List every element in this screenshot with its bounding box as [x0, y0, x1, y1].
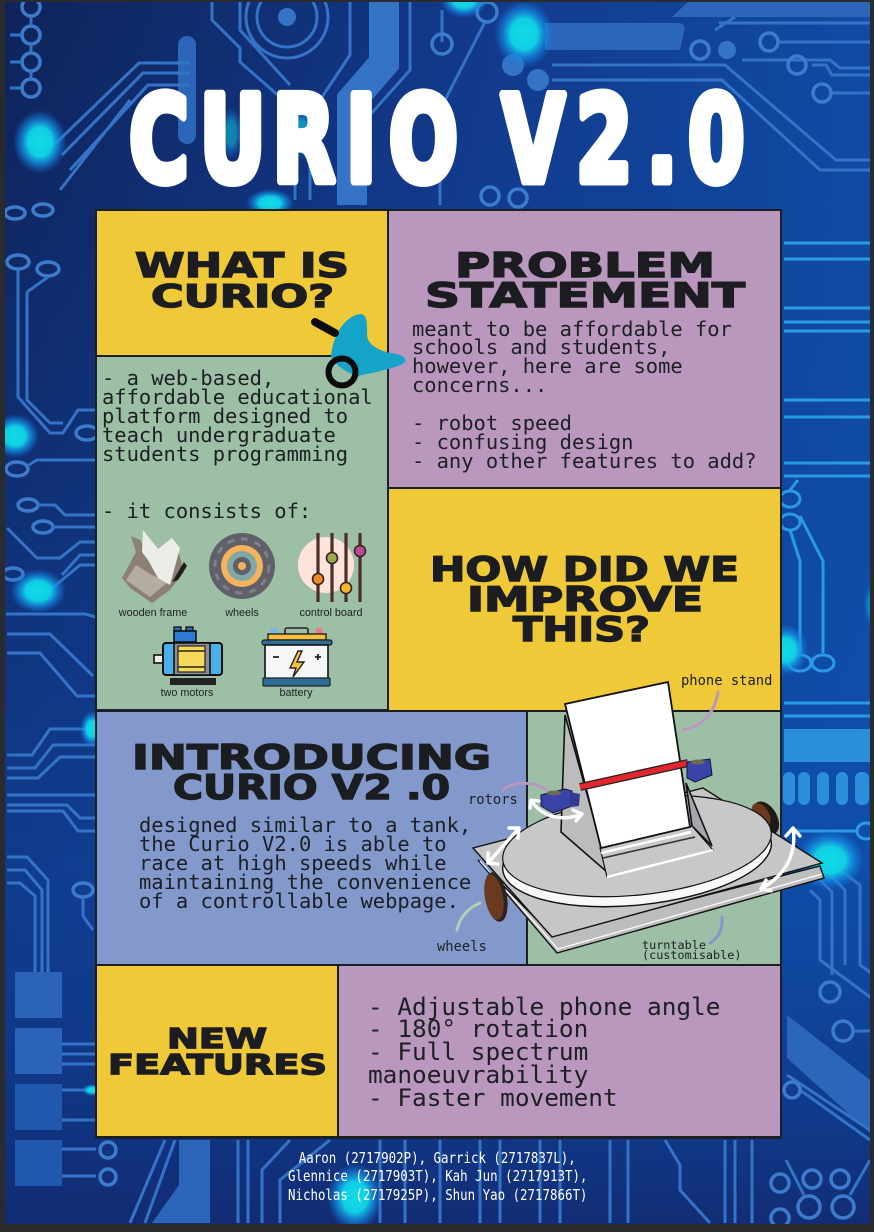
- text: features list: - Adjustable phone angle: [368, 992, 720, 1021]
- heading: problem statement: STATEMENT: [425, 276, 745, 315]
- credits: [288, 1150, 587, 1204]
- label: control board: control board: [299, 607, 363, 619]
- text: features list: manoeuvrability: [368, 1060, 588, 1089]
- heading: how did we improve this: HOW DID WE: [430, 550, 739, 589]
- panel: new features list: [339, 966, 780, 1136]
- icon: two motors: [154, 627, 222, 685]
- label: turntable: turntable: [642, 938, 706, 952]
- text: platform description: [102, 366, 373, 466]
- heading: problem statement: [425, 246, 745, 315]
- panel: new features heading: [97, 966, 337, 1136]
- icon: battery: [262, 628, 332, 686]
- text: problem body: however, here are some: [412, 354, 683, 378]
- icon: curio logo: [315, 314, 405, 386]
- callout curve: turntable: [710, 917, 722, 943]
- red bar: [580, 763, 688, 787]
- text: platform description: affordable educational: [102, 385, 373, 409]
- label: wooden frame: wooden frame: [118, 607, 187, 619]
- turntable: [498, 783, 776, 919]
- callout curve: phone stand: [683, 692, 718, 730]
- icon: control board: [298, 533, 366, 602]
- left side traces: [5, 207, 25, 219]
- robot illustration: [437, 673, 824, 962]
- stand base: [600, 826, 713, 877]
- text: intro body: race at high speeds while: [139, 851, 447, 875]
- text: problem body: [412, 317, 757, 473]
- wheel: right rear: [747, 797, 785, 839]
- text: features list: - Faster movement: [368, 1083, 618, 1112]
- label: battery: battery: [279, 687, 313, 699]
- heading: how did we improve this: [430, 550, 739, 649]
- panel: introducing curio v2.0: [97, 712, 526, 964]
- rotor: left: [541, 789, 580, 813]
- arrows: [488, 800, 800, 891]
- panel: description: [97, 357, 387, 709]
- heading: what is curio: CURIO?: [151, 279, 334, 315]
- label: two motors: two motors: [161, 687, 214, 699]
- heading: how did we improve this: IMPROVE: [467, 580, 703, 619]
- text: problem body: - robot speed: [412, 411, 572, 435]
- heading: what is curio: WHAT IS: [135, 246, 349, 285]
- text: platform description: - a web-based,: [102, 366, 274, 390]
- callout curve: wheels: [457, 903, 480, 930]
- text: features list: - Full spectrum: [368, 1037, 588, 1066]
- title: CURIO V2.0: [129, 71, 744, 209]
- base plate upper: [473, 788, 822, 937]
- label: turntable: (customisable): [642, 948, 741, 962]
- base plate lower: [478, 860, 824, 953]
- heading: problem statement: PROBLEM: [455, 246, 715, 285]
- label: rotors: rotors: [468, 792, 518, 808]
- text: it consists of: - it consists of:: [102, 499, 311, 523]
- text: features list: [368, 992, 720, 1112]
- heading: introducing curio v2.0: INTRODUCING: [132, 738, 491, 777]
- heading: what is curio: [135, 246, 349, 315]
- text: intro body: [139, 813, 471, 913]
- label: wheels: wheels: [437, 939, 487, 955]
- rotor: right: [687, 759, 712, 782]
- panel: robot background: [528, 712, 780, 964]
- callout curve: rotors: [503, 783, 547, 790]
- right side traces: [784, 243, 874, 476]
- panel: how did we improve: [389, 489, 780, 710]
- bottom traces: [100, 1142, 116, 1158]
- icon: wheel: [209, 533, 275, 599]
- heading: new features: [108, 1022, 327, 1081]
- heading: introducing curio v2.0: CURIO V2 .0: [173, 768, 450, 807]
- text: problem body: - confusing design: [412, 430, 633, 454]
- text: intro body: designed similar to a tank,: [139, 813, 471, 837]
- text: intro body: maintaining the convenience: [139, 870, 471, 894]
- label: phone stand: phone stand: [681, 673, 772, 689]
- credits: Glennice (2717903T), Kah Jun (2717913T),: [288, 1168, 587, 1185]
- text: problem body: - any other features to add?: [412, 449, 757, 473]
- text: problem body: meant to be affordable for: [412, 317, 732, 341]
- text: features list: - 180° rotation: [368, 1014, 588, 1043]
- text: intro body: the Curio V2.0 is able to: [139, 832, 447, 856]
- phone plate: [565, 682, 690, 848]
- heading: introducing curio v2.0: [132, 738, 491, 807]
- wheel: left front: [481, 870, 511, 924]
- text: intro body: of a controllable webpage.: [139, 889, 459, 913]
- text: problem body: concerns...: [412, 373, 547, 397]
- panel: problem statement: [389, 211, 780, 487]
- top traces: [672, 0, 874, 17]
- panel: what is curio: [97, 211, 387, 355]
- text: problem body: schools and students,: [412, 335, 670, 359]
- label: turntable: [642, 938, 741, 962]
- heading: new features: NEW: [167, 1022, 267, 1055]
- text: platform description: platform designed to: [102, 404, 348, 428]
- panel grid: [95, 209, 782, 1139]
- icon: wooden frame: [122, 530, 187, 603]
- text: platform description: students programming: [102, 442, 348, 466]
- stand supports: [561, 715, 607, 872]
- heading: new features: FEATURES: [108, 1048, 327, 1081]
- heading: how did we improve this: THIS?: [513, 610, 650, 649]
- label: wheels: wheels: [224, 607, 259, 619]
- text: platform description: teach undergraduate: [102, 423, 336, 447]
- credits: Aaron (2717902P), Garrick (2717837L),: [299, 1150, 576, 1167]
- credits: Nicholas (2717925P), Shun Yao (2717866T): [288, 1187, 587, 1204]
